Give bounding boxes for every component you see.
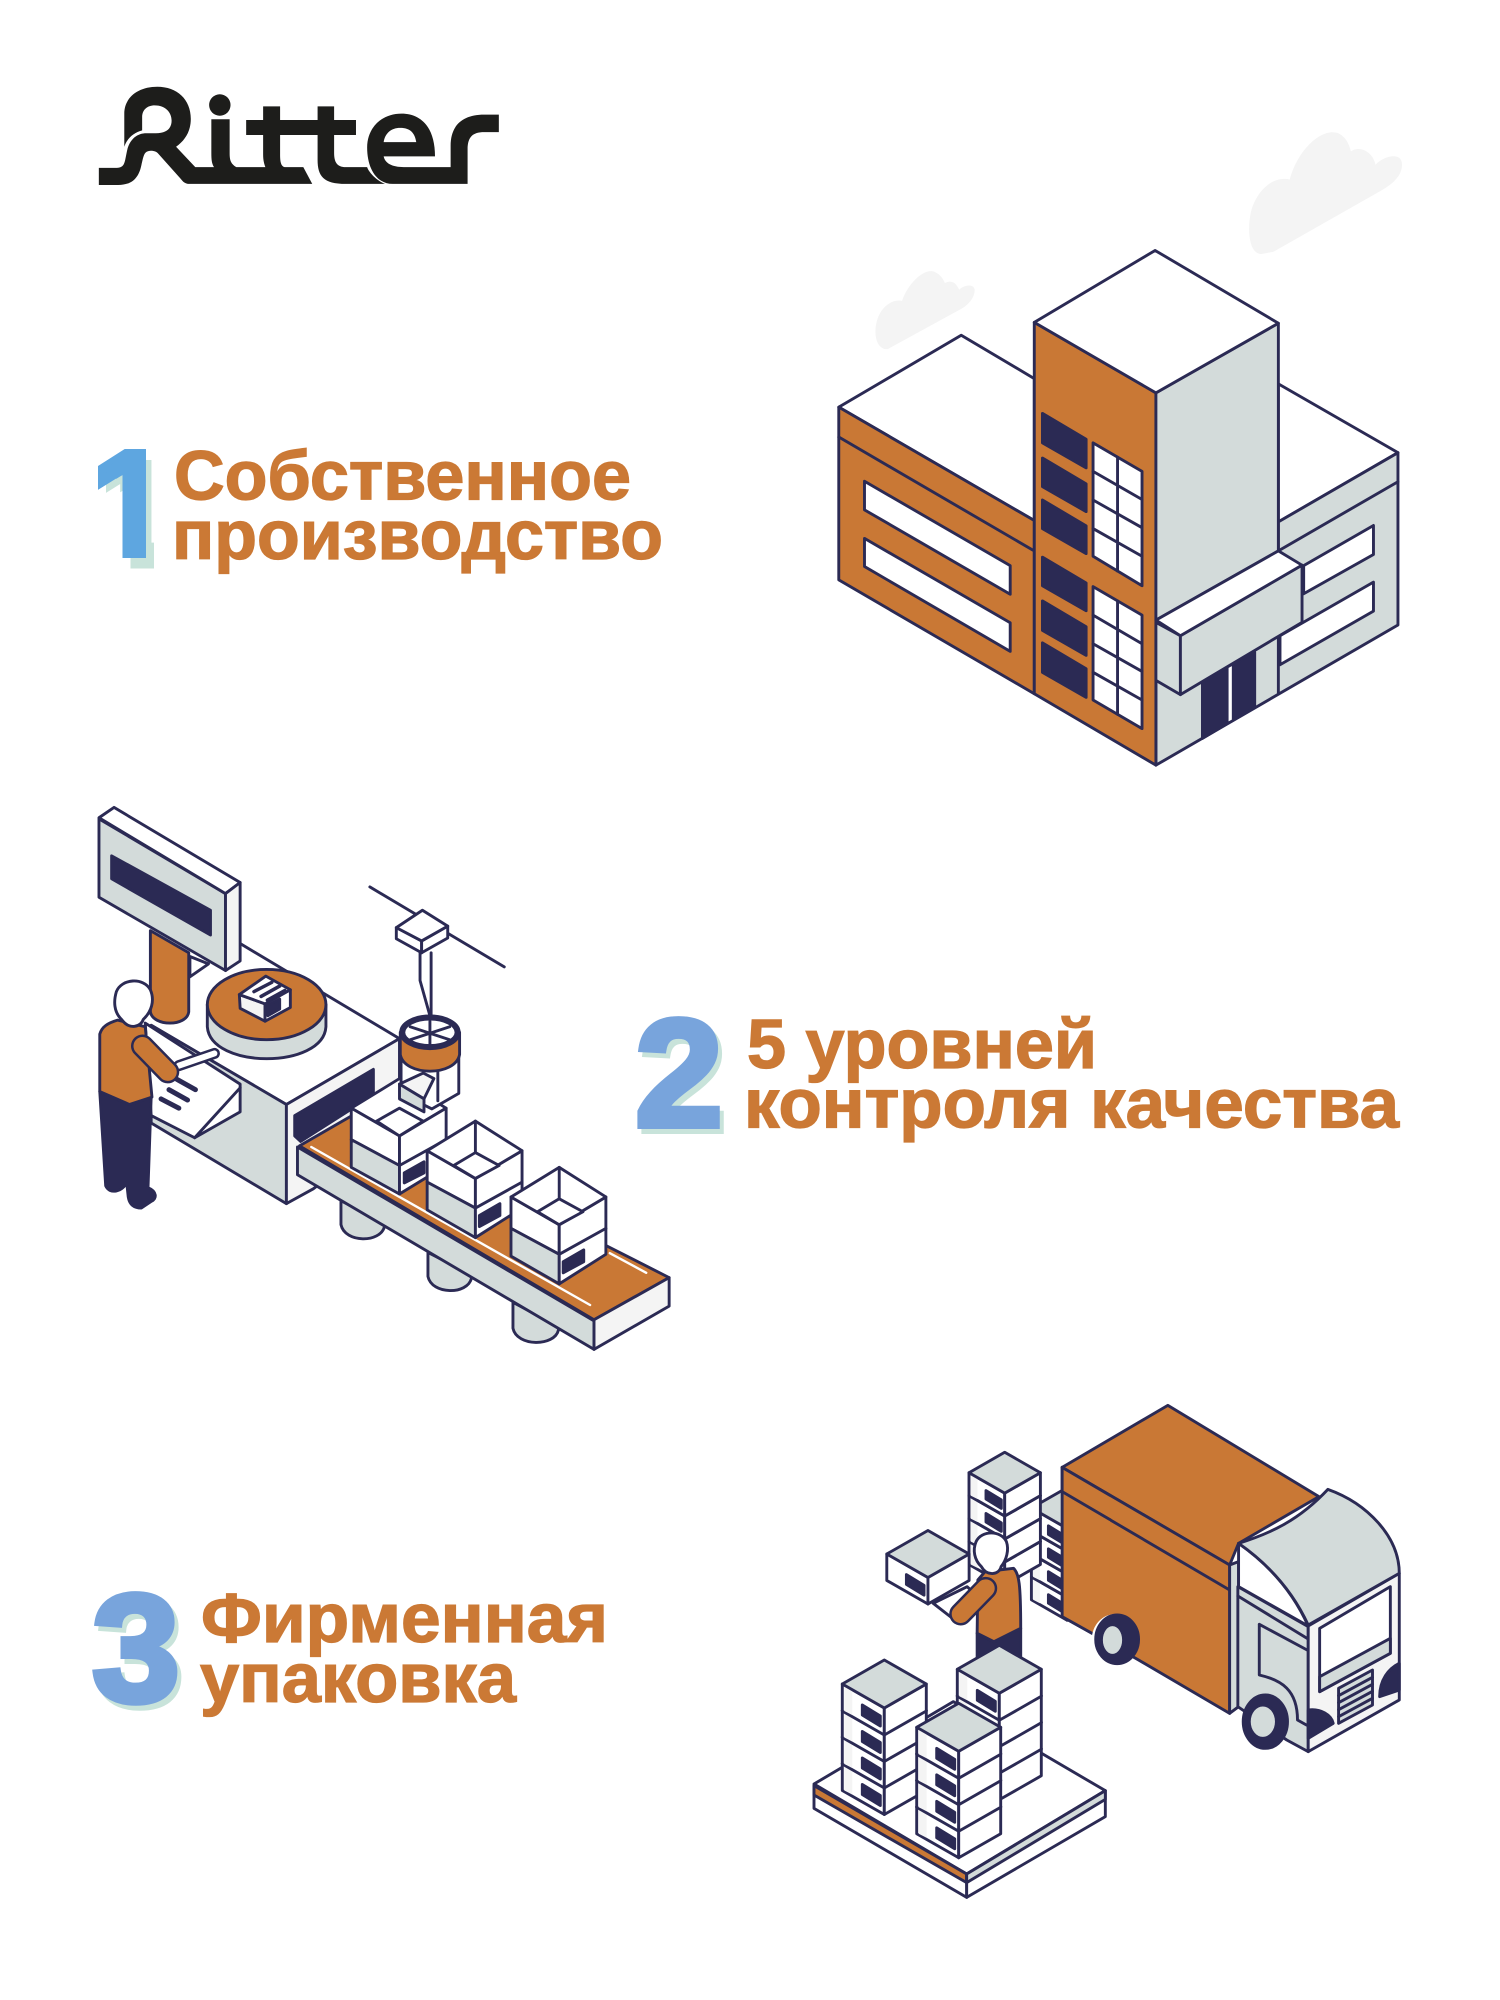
stack of boxes behind truck	[1031, 1488, 1103, 1620]
heading: 5 levels of quality control: контроля качества	[744, 1064, 1400, 1142]
overhead rail	[370, 887, 504, 1016]
number 1	[98, 449, 154, 568]
control panel	[145, 1023, 240, 1138]
heading: branded packaging: Фирменная	[201, 1579, 608, 1657]
cargo side	[1062, 1467, 1230, 1713]
heading: 5 levels of quality control	[744, 1005, 1400, 1142]
operator	[100, 981, 214, 1208]
box held by worker	[887, 1530, 969, 1604]
monitor on post	[99, 807, 240, 1023]
front stack	[917, 1703, 1001, 1858]
back stack	[957, 1645, 1041, 1800]
cab	[1230, 1489, 1399, 1752]
cargo line	[1062, 1492, 1230, 1590]
conveyor belt	[297, 1116, 669, 1349]
right wing	[1156, 384, 1398, 765]
heading: branded packaging: упаковка	[200, 1639, 517, 1717]
number 2: 2	[635, 988, 723, 1159]
entrance	[1156, 551, 1302, 738]
box 1	[351, 1079, 446, 1194]
illustration: quality control conveyor	[99, 807, 669, 1349]
stack of boxes behind worker	[969, 1452, 1040, 1585]
left stack	[842, 1660, 926, 1814]
machine body	[151, 944, 399, 1204]
cargo top	[1062, 1405, 1319, 1565]
held box hand	[933, 1587, 974, 1620]
heading: own production: производство	[172, 496, 663, 574]
heading: own production: Собственное	[174, 436, 631, 514]
legs of conveyor	[341, 1201, 558, 1342]
legs	[977, 1628, 1021, 1660]
logo: Ritter	[99, 87, 499, 185]
number 1: 1	[85, 418, 171, 591]
clouds	[875, 132, 1402, 349]
left wing	[839, 335, 1034, 694]
illustration: delivery truck	[1062, 1405, 1399, 1752]
heading: own production	[172, 436, 663, 574]
illustration: factory building	[839, 132, 1402, 765]
heading: branded packaging	[200, 1579, 608, 1717]
number 1: 1	[89, 424, 175, 596]
scanner head	[399, 1018, 460, 1112]
torso	[977, 1568, 1021, 1642]
truck body edge over boxes	[1062, 1467, 1139, 1665]
turntable	[207, 969, 326, 1059]
tower	[1034, 250, 1278, 765]
number 3: 3	[92, 1563, 180, 1734]
pallet	[814, 1702, 1105, 1897]
box 2	[427, 1121, 522, 1238]
head	[974, 1533, 1008, 1574]
heading: 5 levels of quality control: 5 уровней	[747, 1005, 1097, 1083]
number 3: 3	[96, 1568, 184, 1739]
arm	[961, 1588, 986, 1614]
pallet with boxes	[814, 1645, 1105, 1897]
box 3	[511, 1167, 606, 1284]
number 2: 2	[639, 993, 727, 1164]
worker carrying a box	[933, 1533, 1021, 1660]
